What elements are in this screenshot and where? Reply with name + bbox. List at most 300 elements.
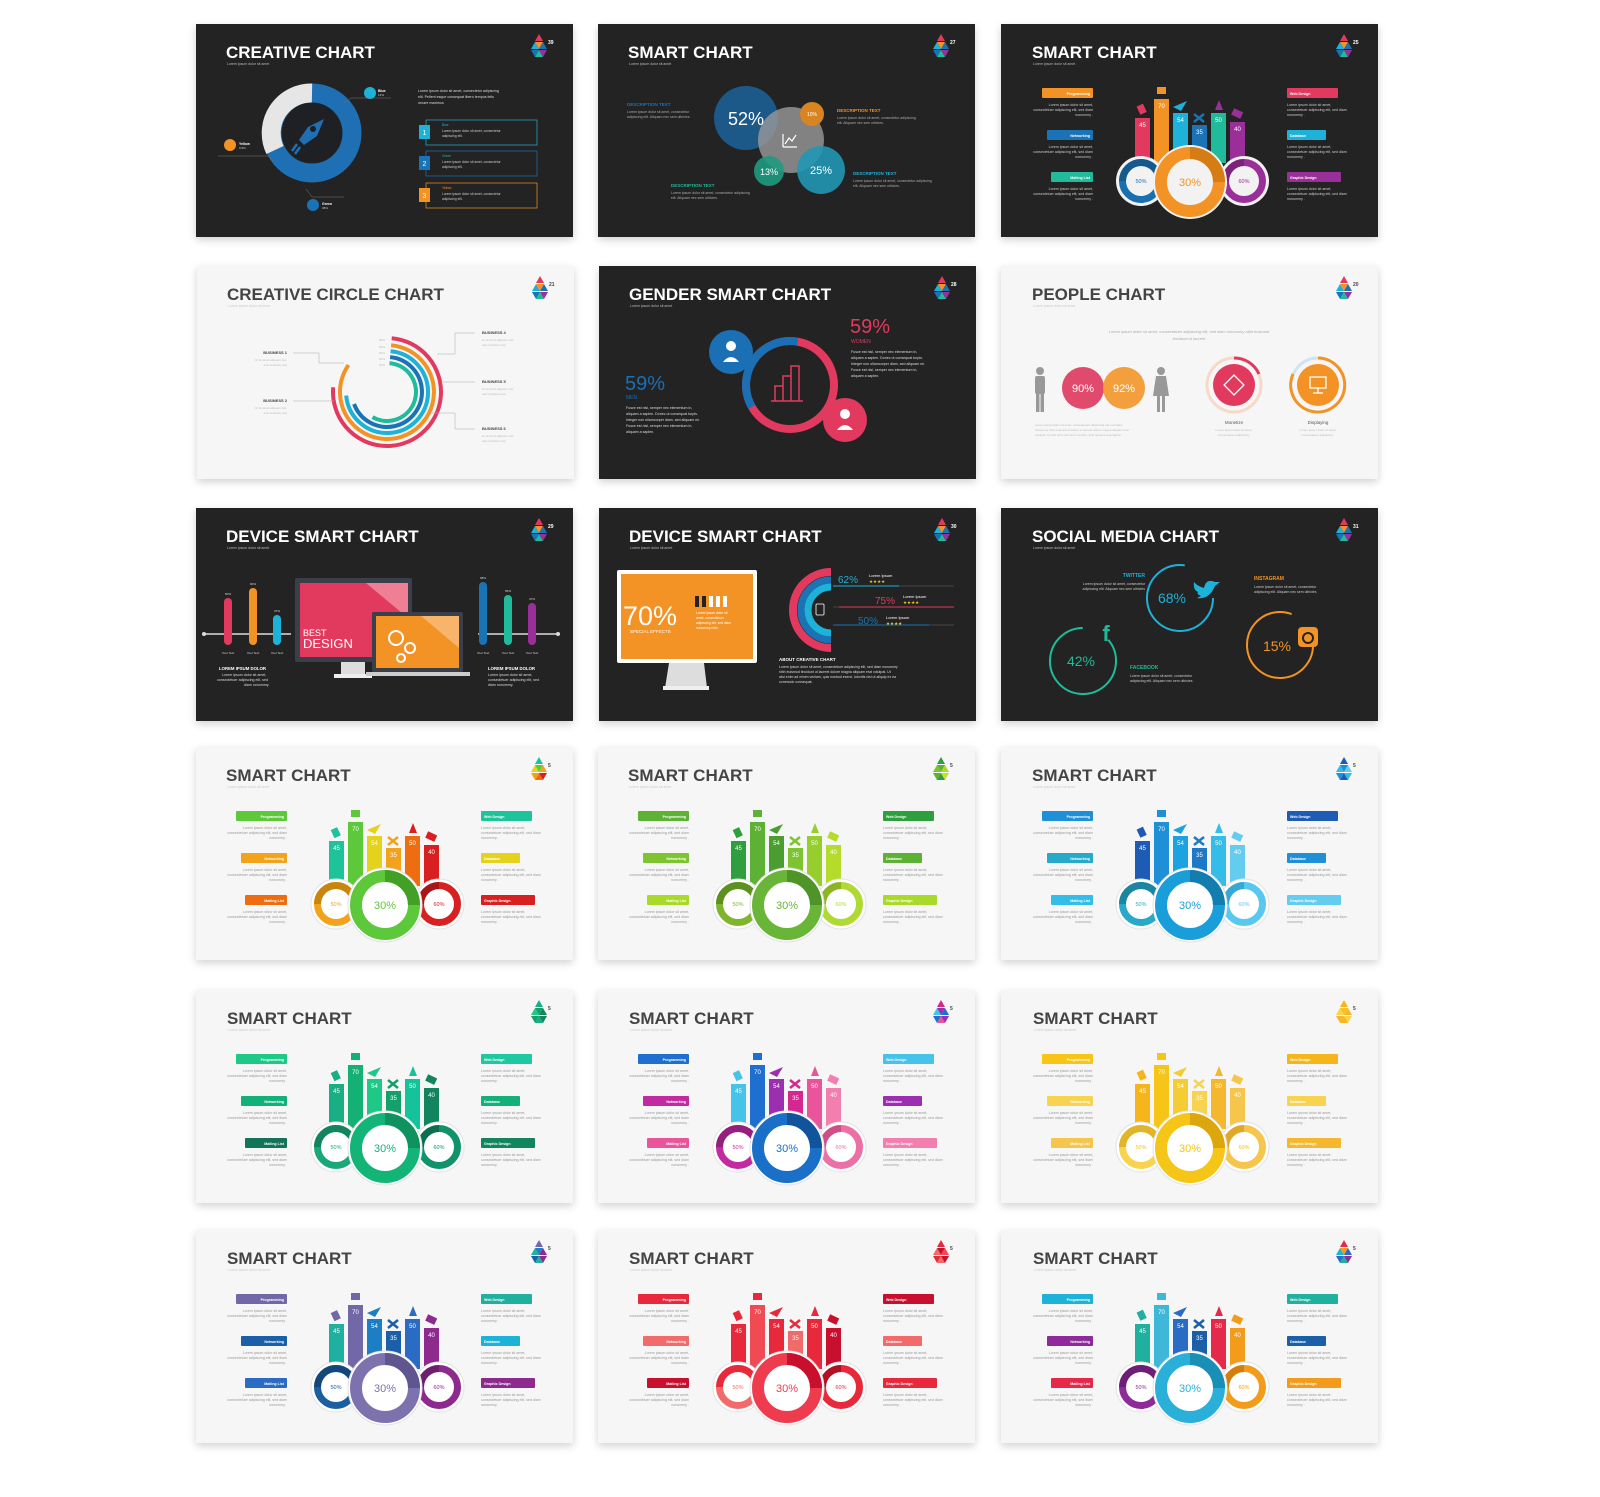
slide: social media chart <box>1001 508 1378 721</box>
right labels: nonummy . <box>1287 1403 1305 1407</box>
description texts <box>627 102 932 200</box>
right labels: consectetuer adipiscing elit, sed diam <box>1287 108 1347 112</box>
right labels <box>1287 1294 1347 1407</box>
right labels: nonummy . <box>481 1361 499 1365</box>
left labels: nonummy . <box>1075 836 1093 840</box>
bar chart: 54 <box>371 1324 378 1330</box>
donut circles: 60% <box>835 902 847 908</box>
right labels: Lorem ipsum dolor sit amet, <box>1287 868 1331 872</box>
description texts: Lorem ipsum dolor sit amet, consectetur adipiscing <box>837 116 916 120</box>
right labels: consectetuer adipiscing elit, sed diam <box>1287 1158 1347 1162</box>
left labels: Networking <box>1070 857 1090 861</box>
arc chart: 80% <box>379 345 385 349</box>
right labels <box>481 811 541 924</box>
left labels: Networking <box>666 857 686 861</box>
logo: 5 <box>1353 1006 1356 1012</box>
donut chart <box>271 93 352 173</box>
logo: 5 <box>1353 763 1356 769</box>
list boxes: adipiscing elit. <box>442 165 463 169</box>
title: SMART CHART <box>227 1249 352 1268</box>
arc chart: Lorem Ipsum <box>886 615 910 620</box>
right labels: Lorem ipsum dolor sit amet, <box>883 868 927 872</box>
right labels: consectetuer adipiscing elit, sed diam <box>1287 1356 1347 1360</box>
logo <box>933 1000 953 1023</box>
slide: smart chart green <box>598 747 975 960</box>
left labels: Programming <box>261 1298 284 1302</box>
left labels: Lorem ipsum dolor sit amet, <box>1049 910 1093 914</box>
bar chart: 54 <box>371 841 378 847</box>
bar chart: 54 <box>1177 1084 1184 1090</box>
left labels <box>227 811 287 924</box>
logo: 5 <box>548 1006 551 1012</box>
left labels: nonummy . <box>269 1319 287 1323</box>
left labels: Programming <box>663 1058 686 1062</box>
donut circles: 30% <box>776 1383 798 1395</box>
bar chart: 35 <box>1196 853 1203 859</box>
arc chart: 20% <box>379 363 385 367</box>
title: CREATIVE CHART <box>226 43 376 62</box>
right labels: Web Design <box>1290 92 1311 96</box>
men stat: Fusce est nisl, semper nec elementum in, <box>626 424 692 428</box>
logo: 5 <box>548 1246 551 1252</box>
monitor: adipiscing elit, sed diam <box>696 621 731 625</box>
title: SOCIAL MEDIA CHART <box>1032 527 1220 546</box>
right labels <box>1287 88 1347 201</box>
left labels: nonummy . <box>1075 197 1093 201</box>
bar chart <box>731 1293 841 1369</box>
title: Lorem ipsum dolor sit amet <box>630 1028 672 1032</box>
title: SMART CHART <box>1033 1249 1158 1268</box>
arc chart: 50% <box>379 357 385 361</box>
right labels: nonummy . <box>481 1319 499 1323</box>
business labels: BUSINESS 1 <box>263 350 288 355</box>
twitter: 68% <box>1158 590 1186 606</box>
right labels: consectetuer adipiscing elit, sed diam <box>481 1398 541 1402</box>
list boxes: Blue <box>442 123 449 127</box>
left labels: Mailing List <box>264 1142 285 1146</box>
slide: smart chart red <box>598 1230 975 1443</box>
bar chart: 50 <box>811 841 818 847</box>
left labels: nonummy . <box>1075 1121 1093 1125</box>
arc chart: ★★★★ <box>903 600 920 605</box>
text block: ornare maximus <box>418 101 444 105</box>
title: GENDER SMART CHART <box>629 285 832 304</box>
bottom texts: LOREM IPSUM DOLOR <box>219 666 267 671</box>
monitor: amet, consectetuer <box>696 616 725 620</box>
list boxes: Lorem ipsum dolor sit amet, consectetur <box>442 160 502 164</box>
bar chart: 40 <box>428 1333 435 1339</box>
right labels: Graphic Design <box>886 1382 913 1386</box>
right labels: Lorem ipsum dolor sit amet, <box>883 1069 927 1073</box>
title: Lorem ipsum dolor sit amet <box>228 1028 270 1032</box>
left labels: Programming <box>663 1298 686 1302</box>
left labels: Mailing List <box>1070 1382 1091 1386</box>
title: Lorem ipsum dolor sit amet <box>630 304 672 308</box>
right labels: Web Design <box>1290 1298 1311 1302</box>
donut circles <box>311 1351 464 1425</box>
title: Lorem ipsum dolor sit amet <box>227 785 269 789</box>
bar chart <box>329 1293 439 1369</box>
bar chart: 40 <box>830 850 837 856</box>
facebook: Lorem ipsum dolor sit amet, consectetur <box>1130 674 1193 678</box>
donut circles: 60% <box>433 1145 445 1151</box>
donut circles: 30% <box>374 1143 396 1155</box>
bar chart: 45 <box>1139 123 1146 129</box>
bar chart: 50 <box>811 1084 818 1090</box>
instagram: adipiscing elit. Aliquam nec sem ultricies <box>1254 590 1317 594</box>
description texts: DESCRIPTION TEXT <box>853 171 897 176</box>
bar chart: 35 <box>1196 130 1203 136</box>
logo: 29 <box>548 524 554 530</box>
business labels: quis tincidunt erat <box>482 343 506 347</box>
donut circles: 50% <box>330 1145 342 1151</box>
business labels: quis tincidunt erat <box>482 439 506 443</box>
list boxes: Green <box>442 154 451 158</box>
left labels <box>227 1054 287 1167</box>
logo <box>531 757 551 780</box>
right labels: Lorem ipsum dolor sit amet, <box>1287 1153 1331 1157</box>
right labels: nonummy . <box>883 1361 901 1365</box>
right labels: nonummy . <box>1287 113 1305 117</box>
donut circles: 50% <box>330 1385 342 1391</box>
logo: 31 <box>1353 524 1359 530</box>
donut circles: 30% <box>1179 177 1201 189</box>
left labels: nonummy . <box>269 1079 287 1083</box>
right labels: nonummy . <box>883 1079 901 1083</box>
right labels: Lorem ipsum dolor sit amet, <box>1287 103 1331 107</box>
people with percentages: nonummy nibh euismod tincidunt ut laoreet dolore magna aliquam erat <box>1035 428 1129 432</box>
right labels: consectetuer adipiscing elit, sed diam <box>883 1116 943 1120</box>
right labels: nonummy . <box>481 1403 499 1407</box>
title: Lorem ipsum dolor sit amet <box>1034 1028 1076 1032</box>
left labels: Programming <box>261 1058 284 1062</box>
right labels: nonummy . <box>1287 1319 1305 1323</box>
logo <box>531 1000 551 1023</box>
logo <box>1336 34 1359 57</box>
right pill bars: 47% <box>529 597 535 601</box>
logo: 5 <box>548 763 551 769</box>
left labels: nonummy . <box>671 1121 689 1125</box>
right labels: consectetuer adipiscing elit, sed diam <box>883 1074 943 1078</box>
left labels: consectetuer adipiscing elit, sed diam <box>1033 831 1093 835</box>
logo <box>934 276 957 299</box>
right labels: Database <box>484 857 500 861</box>
right labels: Lorem ipsum dolor sit amet, <box>1287 1069 1331 1073</box>
left labels: nonummy . <box>671 1319 689 1323</box>
bar chart: 35 <box>390 853 397 859</box>
bar chart: 70 <box>1158 1310 1165 1316</box>
title: Lorem ipsum dolor sit amet <box>1033 304 1075 308</box>
right labels: Database <box>886 1340 902 1344</box>
logo: 21 <box>549 282 555 288</box>
right labels: consectetuer adipiscing elit, sed diam <box>481 1314 541 1318</box>
facebook: f <box>1102 621 1110 646</box>
slide: smart chart blue magenta <box>598 990 975 1203</box>
logo: 5 <box>1353 1246 1356 1252</box>
bar chart: 50 <box>409 1324 416 1330</box>
right labels: Database <box>886 1100 902 1104</box>
left pill bars: Your Text <box>222 651 234 655</box>
right labels: Web Design <box>484 815 505 819</box>
text block: elit. Pellent esque consequat libero tempus felis <box>418 95 494 99</box>
right labels: Graphic Design <box>886 899 913 903</box>
left labels: Lorem ipsum dolor sit amet, <box>645 1153 689 1157</box>
right labels: nonummy . <box>883 1121 901 1125</box>
icon: rocket <box>292 119 324 154</box>
men stat: MEN <box>626 395 638 401</box>
bar chart: 54 <box>1177 118 1184 124</box>
right labels: Graphic Design <box>1290 176 1317 180</box>
bubble chart: 52% <box>728 109 764 129</box>
left labels: Lorem ipsum dolor sit amet, <box>1049 1351 1093 1355</box>
bar chart: 50 <box>409 841 416 847</box>
right labels: Web Design <box>484 1058 505 1062</box>
right labels: Web Design <box>1290 1058 1311 1062</box>
left labels: Lorem ipsum dolor sit amet, <box>645 826 689 830</box>
right labels: Lorem ipsum dolor sit amet, <box>883 1111 927 1115</box>
right labels: Web Design <box>886 1058 907 1062</box>
right labels: Lorem ipsum dolor sit amet, <box>481 1351 525 1355</box>
bar chart: 70 <box>754 1310 761 1316</box>
right labels: nonummy . <box>883 920 901 924</box>
right labels: consectetuer adipiscing elit, sed diam <box>1287 1314 1347 1318</box>
about text: nibh euismod tincidunt ut laoreet dolore magna aliquam erat volutpat. Ut <box>779 670 891 674</box>
left labels: nonummy . <box>269 1121 287 1125</box>
description texts: DESCRIPTION TEXT <box>627 102 671 107</box>
bar chart: 70 <box>1158 827 1165 833</box>
callout: green <box>306 189 344 211</box>
list boxes: adipiscing elit. <box>442 134 463 138</box>
bar chart: 40 <box>830 1093 837 1099</box>
left labels: nonummy . <box>269 1403 287 1407</box>
business labels: quis tincidunt erat <box>263 363 287 367</box>
left labels: Lorem ipsum dolor sit amet, <box>1049 826 1093 830</box>
donut circles <box>713 1351 866 1425</box>
title: CREATIVE CIRCLE CHART <box>227 285 445 304</box>
business labels: Ut sit amet aliquam nisi. <box>482 434 514 438</box>
arc chart: ★★★★ <box>886 621 903 626</box>
bar chart: 54 <box>1177 1324 1184 1330</box>
right labels: consectetuer adipiscing elit, sed diam <box>1287 831 1347 835</box>
title: SMART CHART <box>629 1009 754 1028</box>
left labels: Lorem ipsum dolor sit amet, <box>645 868 689 872</box>
right labels: nonummy . <box>883 836 901 840</box>
left labels: nonummy . <box>671 836 689 840</box>
left labels: Lorem ipsum dolor sit amet, <box>1049 1309 1093 1313</box>
right labels: Lorem ipsum dolor sit amet, <box>883 1351 927 1355</box>
description texts: Lorem ipsum dolor sit amet, consectetur <box>627 110 690 114</box>
right labels: nonummy . <box>481 878 499 882</box>
right labels: nonummy . <box>481 920 499 924</box>
right labels: Lorem ipsum dolor sit amet, <box>1287 910 1331 914</box>
right pill bars: 68% <box>480 576 486 580</box>
right labels: nonummy . <box>1287 155 1305 159</box>
right labels: consectetuer adipiscing elit, sed diam <box>1287 1074 1347 1078</box>
left pill bars: 37% <box>274 609 280 613</box>
men stat: aliquam a sapien. Donec ut consequat turpis. <box>626 412 698 416</box>
left labels: Lorem ipsum dolor sit amet, <box>1049 187 1093 191</box>
right labels: Web Design <box>1290 815 1311 819</box>
right labels: Database <box>484 1100 500 1104</box>
left labels: consectetuer adipiscing elit, sed diam <box>1033 150 1093 154</box>
left labels: consectetuer adipiscing elit, sed diam <box>1033 1398 1093 1402</box>
right labels <box>481 1294 541 1407</box>
right labels: consectetuer adipiscing elit, sed diam <box>883 915 943 919</box>
men stat: 59% <box>625 373 665 395</box>
right labels: nonummy . <box>1287 1079 1305 1083</box>
slide: smart chart multicolor <box>1001 1230 1378 1443</box>
left labels: consectetuer adipiscing elit, sed diam <box>1033 1314 1093 1318</box>
logo <box>934 518 957 541</box>
monitor: Lorem ipsum dolor sit <box>696 611 728 615</box>
right labels: nonummy . <box>481 1121 499 1125</box>
bar chart: 45 <box>333 1089 340 1095</box>
donut circles: 60% <box>835 1385 847 1391</box>
left labels: nonummy . <box>671 1079 689 1083</box>
left labels: Lorem ipsum dolor sit amet, <box>1049 1069 1093 1073</box>
left labels: Lorem ipsum dolor sit amet, <box>243 1111 287 1115</box>
left labels: Lorem ipsum dolor sit amet, <box>1049 1153 1093 1157</box>
callout: blue: Blue <box>378 89 386 93</box>
left labels: consectetuer adipiscing elit, sed diam <box>629 1074 689 1078</box>
logo <box>933 34 956 57</box>
right labels: consectetuer adipiscing elit, sed diam <box>1287 150 1347 154</box>
bar chart <box>329 810 439 886</box>
right labels: consectetuer adipiscing elit, sed diam <box>481 873 541 877</box>
women stat: WOMEN <box>851 339 871 345</box>
slide: smart chart purple <box>196 1230 573 1443</box>
left labels: consectetuer adipiscing elit, sed diam <box>629 1356 689 1360</box>
donut circles <box>311 868 464 942</box>
list boxes: 2 <box>423 161 427 168</box>
about text: commodo consequat. <box>779 680 812 684</box>
instagram: 15% <box>1263 638 1291 654</box>
slide: smart chart blue <box>1001 747 1378 960</box>
right labels: consectetuer adipiscing elit, sed diam <box>481 1116 541 1120</box>
bar chart: 54 <box>773 841 780 847</box>
logo <box>531 518 554 541</box>
men stat: Integer non ullamcorper diam, sed aliquam mi. <box>626 418 700 422</box>
left labels: Lorem ipsum dolor sit amet, <box>645 910 689 914</box>
ring chart <box>709 330 867 442</box>
left labels: Lorem ipsum dolor sit amet, <box>645 1351 689 1355</box>
monitor: 70% <box>623 601 677 631</box>
left labels <box>1033 1294 1093 1407</box>
bar chart: 35 <box>792 1096 799 1102</box>
list boxes: adipiscing elit. <box>442 197 463 201</box>
left labels: consectetuer adipiscing elit, sed diam <box>227 1314 287 1318</box>
list boxes: 3 <box>423 193 427 200</box>
left labels: Lorem ipsum dolor sit amet, <box>243 1393 287 1397</box>
arc chart: ★★★★ <box>869 579 886 584</box>
people with percentages: 90% <box>1072 383 1094 395</box>
left labels: nonummy . <box>1075 155 1093 159</box>
business labels: quis tincidunt erat <box>482 392 506 396</box>
donut circles: 60% <box>433 1385 445 1391</box>
icon: displaying: consectetuer adipiscing . <box>1301 433 1335 437</box>
left labels: Mailing List <box>264 899 285 903</box>
donut circles: 60% <box>1238 1145 1250 1151</box>
bar chart: 45 <box>1139 1089 1146 1095</box>
slide: device smart chart 1 <box>196 508 573 721</box>
bubble chart <box>714 86 845 194</box>
right labels: Lorem ipsum dolor sit amet, <box>481 910 525 914</box>
left labels <box>629 1054 689 1167</box>
bar chart: 45 <box>333 846 340 852</box>
right labels: consectetuer adipiscing elit, sed diam <box>1287 1398 1347 1402</box>
bar chart: 40 <box>830 1333 837 1339</box>
left labels: Mailing List <box>666 1382 687 1386</box>
title: Lorem ipsum dolor sit amet <box>227 62 269 66</box>
business labels: Ut sit amet aliquam nisi. <box>482 387 514 391</box>
bar chart: 40 <box>1234 127 1241 133</box>
arc chart <box>793 572 954 648</box>
title: Lorem ipsum dolor sit amet <box>629 785 671 789</box>
bar chart <box>329 1053 439 1129</box>
text block: Lorem ipsum dolor sit amet, consectetur adipiscing <box>418 89 499 93</box>
logo: 25 <box>1353 40 1359 46</box>
left labels: Lorem ipsum dolor sit amet, <box>1049 868 1093 872</box>
left labels: Lorem ipsum dolor sit amet, <box>1049 1393 1093 1397</box>
logo <box>1336 1000 1356 1023</box>
donut circles <box>1116 145 1269 219</box>
right labels: Graphic Design <box>484 1142 511 1146</box>
right labels: nonummy . <box>481 1079 499 1083</box>
left labels: nonummy . <box>671 1163 689 1167</box>
left labels: consectetuer adipiscing elit, sed diam <box>1033 915 1093 919</box>
twitter: adipiscing elit. Aliquam nec sem ultricies <box>1083 587 1145 591</box>
right labels: Lorem ipsum dolor sit amet, <box>481 1393 525 1397</box>
men stat: aliquam a sapien. <box>626 430 654 434</box>
title: Lorem ipsum dolor sit amet <box>1033 62 1075 66</box>
title: Lorem ipsum dolor sit amet <box>227 546 269 550</box>
bar chart: 54 <box>773 1324 780 1330</box>
title: Lorem ipsum dolor sit amet <box>1034 1268 1076 1272</box>
left pill bars: Your Text <box>271 651 283 655</box>
left labels: Lorem ipsum dolor sit amet, <box>243 1351 287 1355</box>
donut circles <box>713 1111 866 1185</box>
left labels: consectetuer adipiscing elit, sed diam <box>1033 873 1093 877</box>
left labels: Mailing List <box>666 899 687 903</box>
arc chart <box>333 338 441 446</box>
icon: monetize: Monetize <box>1225 420 1244 425</box>
logo: 5 <box>950 763 953 769</box>
right labels: Lorem ipsum dolor sit amet, <box>1287 1111 1331 1115</box>
left labels: consectetuer adipiscing elit, sed diam <box>227 1356 287 1360</box>
women stat: Fusce est nisl, semper nec elementum in, <box>851 350 917 354</box>
left labels: Mailing List <box>1070 176 1091 180</box>
left labels: Networking <box>1070 1340 1090 1344</box>
bar chart <box>1135 810 1245 886</box>
list boxes: Lorem ipsum dolor sit amet, consectetur <box>442 192 502 196</box>
left labels: Programming <box>1067 1298 1090 1302</box>
bubble chart: 10% <box>807 112 818 118</box>
bar chart: 40 <box>1234 850 1241 856</box>
right labels: consectetuer adipiscing elit, sed diam <box>883 1398 943 1402</box>
icon: displaying: Lorem ipsum dolor sit amet, <box>1299 428 1337 432</box>
right labels: consectetuer adipiscing elit, sed diam <box>1287 873 1347 877</box>
left labels: Networking <box>264 1100 284 1104</box>
description texts: Lorem ipsum dolor sit amet, consectetur adipiscing <box>853 179 932 183</box>
callout: yellow: Yellow <box>239 142 250 146</box>
right labels: nonummy . <box>883 878 901 882</box>
left labels: Lorem ipsum dolor sit amet, <box>243 868 287 872</box>
icon: monetize: consectetuer adipiscing . <box>1217 433 1251 437</box>
about text <box>779 657 898 684</box>
left labels: consectetuer adipiscing elit, sed diam <box>629 915 689 919</box>
about text: wisi enim ad minim veniam, quis nostrud exerci. lobortis nisl ut aliquip ex ea <box>779 675 896 679</box>
logo <box>1336 518 1359 541</box>
